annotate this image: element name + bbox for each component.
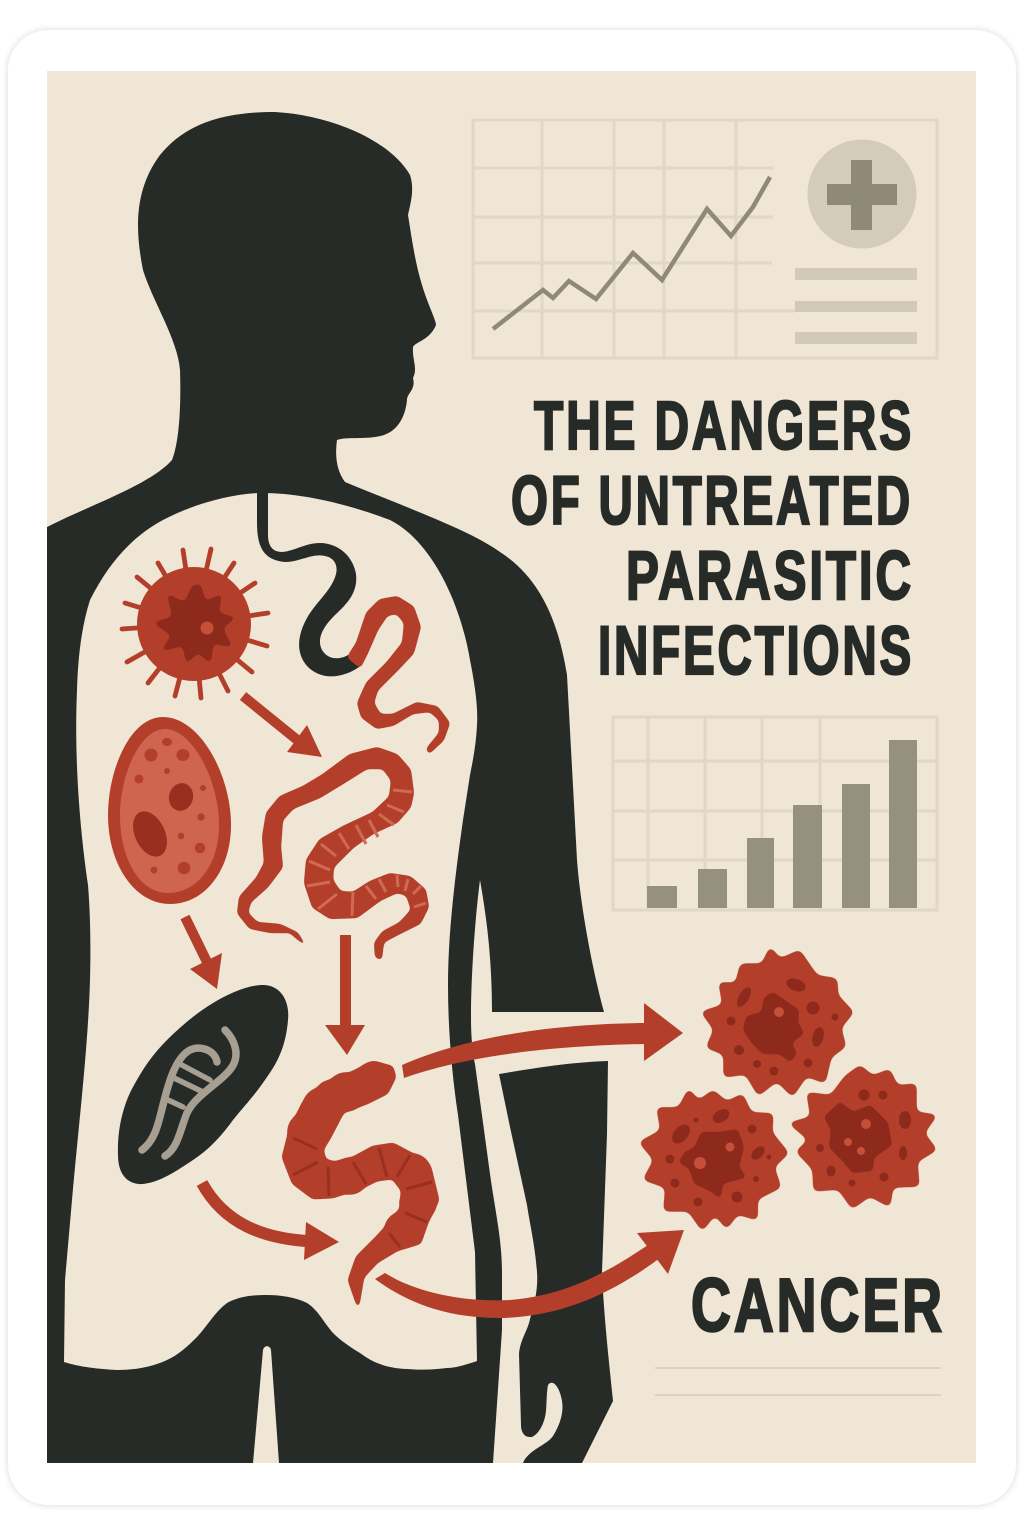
arrow: virus to worm xyxy=(243,696,322,757)
cancer cell left xyxy=(640,1090,788,1230)
arrow: cyst to organ xyxy=(185,917,222,989)
intestine segment lines xyxy=(293,1138,432,1247)
arrow: intestine to cancer upper xyxy=(402,1003,683,1078)
protozoan cyst xyxy=(108,717,231,904)
arrow: intestine to cancer lower xyxy=(375,1230,684,1318)
footer rules xyxy=(655,1368,941,1395)
silhouette: head and torso xyxy=(47,112,604,1463)
line chart trend xyxy=(493,177,770,329)
bars xyxy=(647,740,917,908)
worm stripes xyxy=(307,790,426,916)
virus cell xyxy=(122,549,268,698)
bar chart panel xyxy=(613,717,937,910)
dark infected organ xyxy=(118,985,288,1184)
torso interior xyxy=(64,493,477,1370)
line chart panel xyxy=(473,120,937,358)
cancer cell right xyxy=(790,1066,936,1208)
large striped worm xyxy=(238,748,428,959)
title xyxy=(511,387,914,689)
arrow: organ to intestine xyxy=(202,1183,339,1260)
title: PARASITIC xyxy=(626,537,914,614)
virus nucleus xyxy=(155,585,234,662)
intestine xyxy=(283,1061,438,1306)
cancer cell top xyxy=(702,948,853,1096)
icon: medical cross xyxy=(808,140,916,248)
placeholder text bars xyxy=(795,268,917,344)
esophagus tube xyxy=(257,493,362,676)
silhouette: forearm and hand xyxy=(499,1061,613,1463)
upper worm xyxy=(348,597,449,753)
grey worm inside organ xyxy=(142,1030,236,1156)
leg gap xyxy=(253,1346,279,1463)
arrow: worm to intestine xyxy=(325,935,365,1055)
